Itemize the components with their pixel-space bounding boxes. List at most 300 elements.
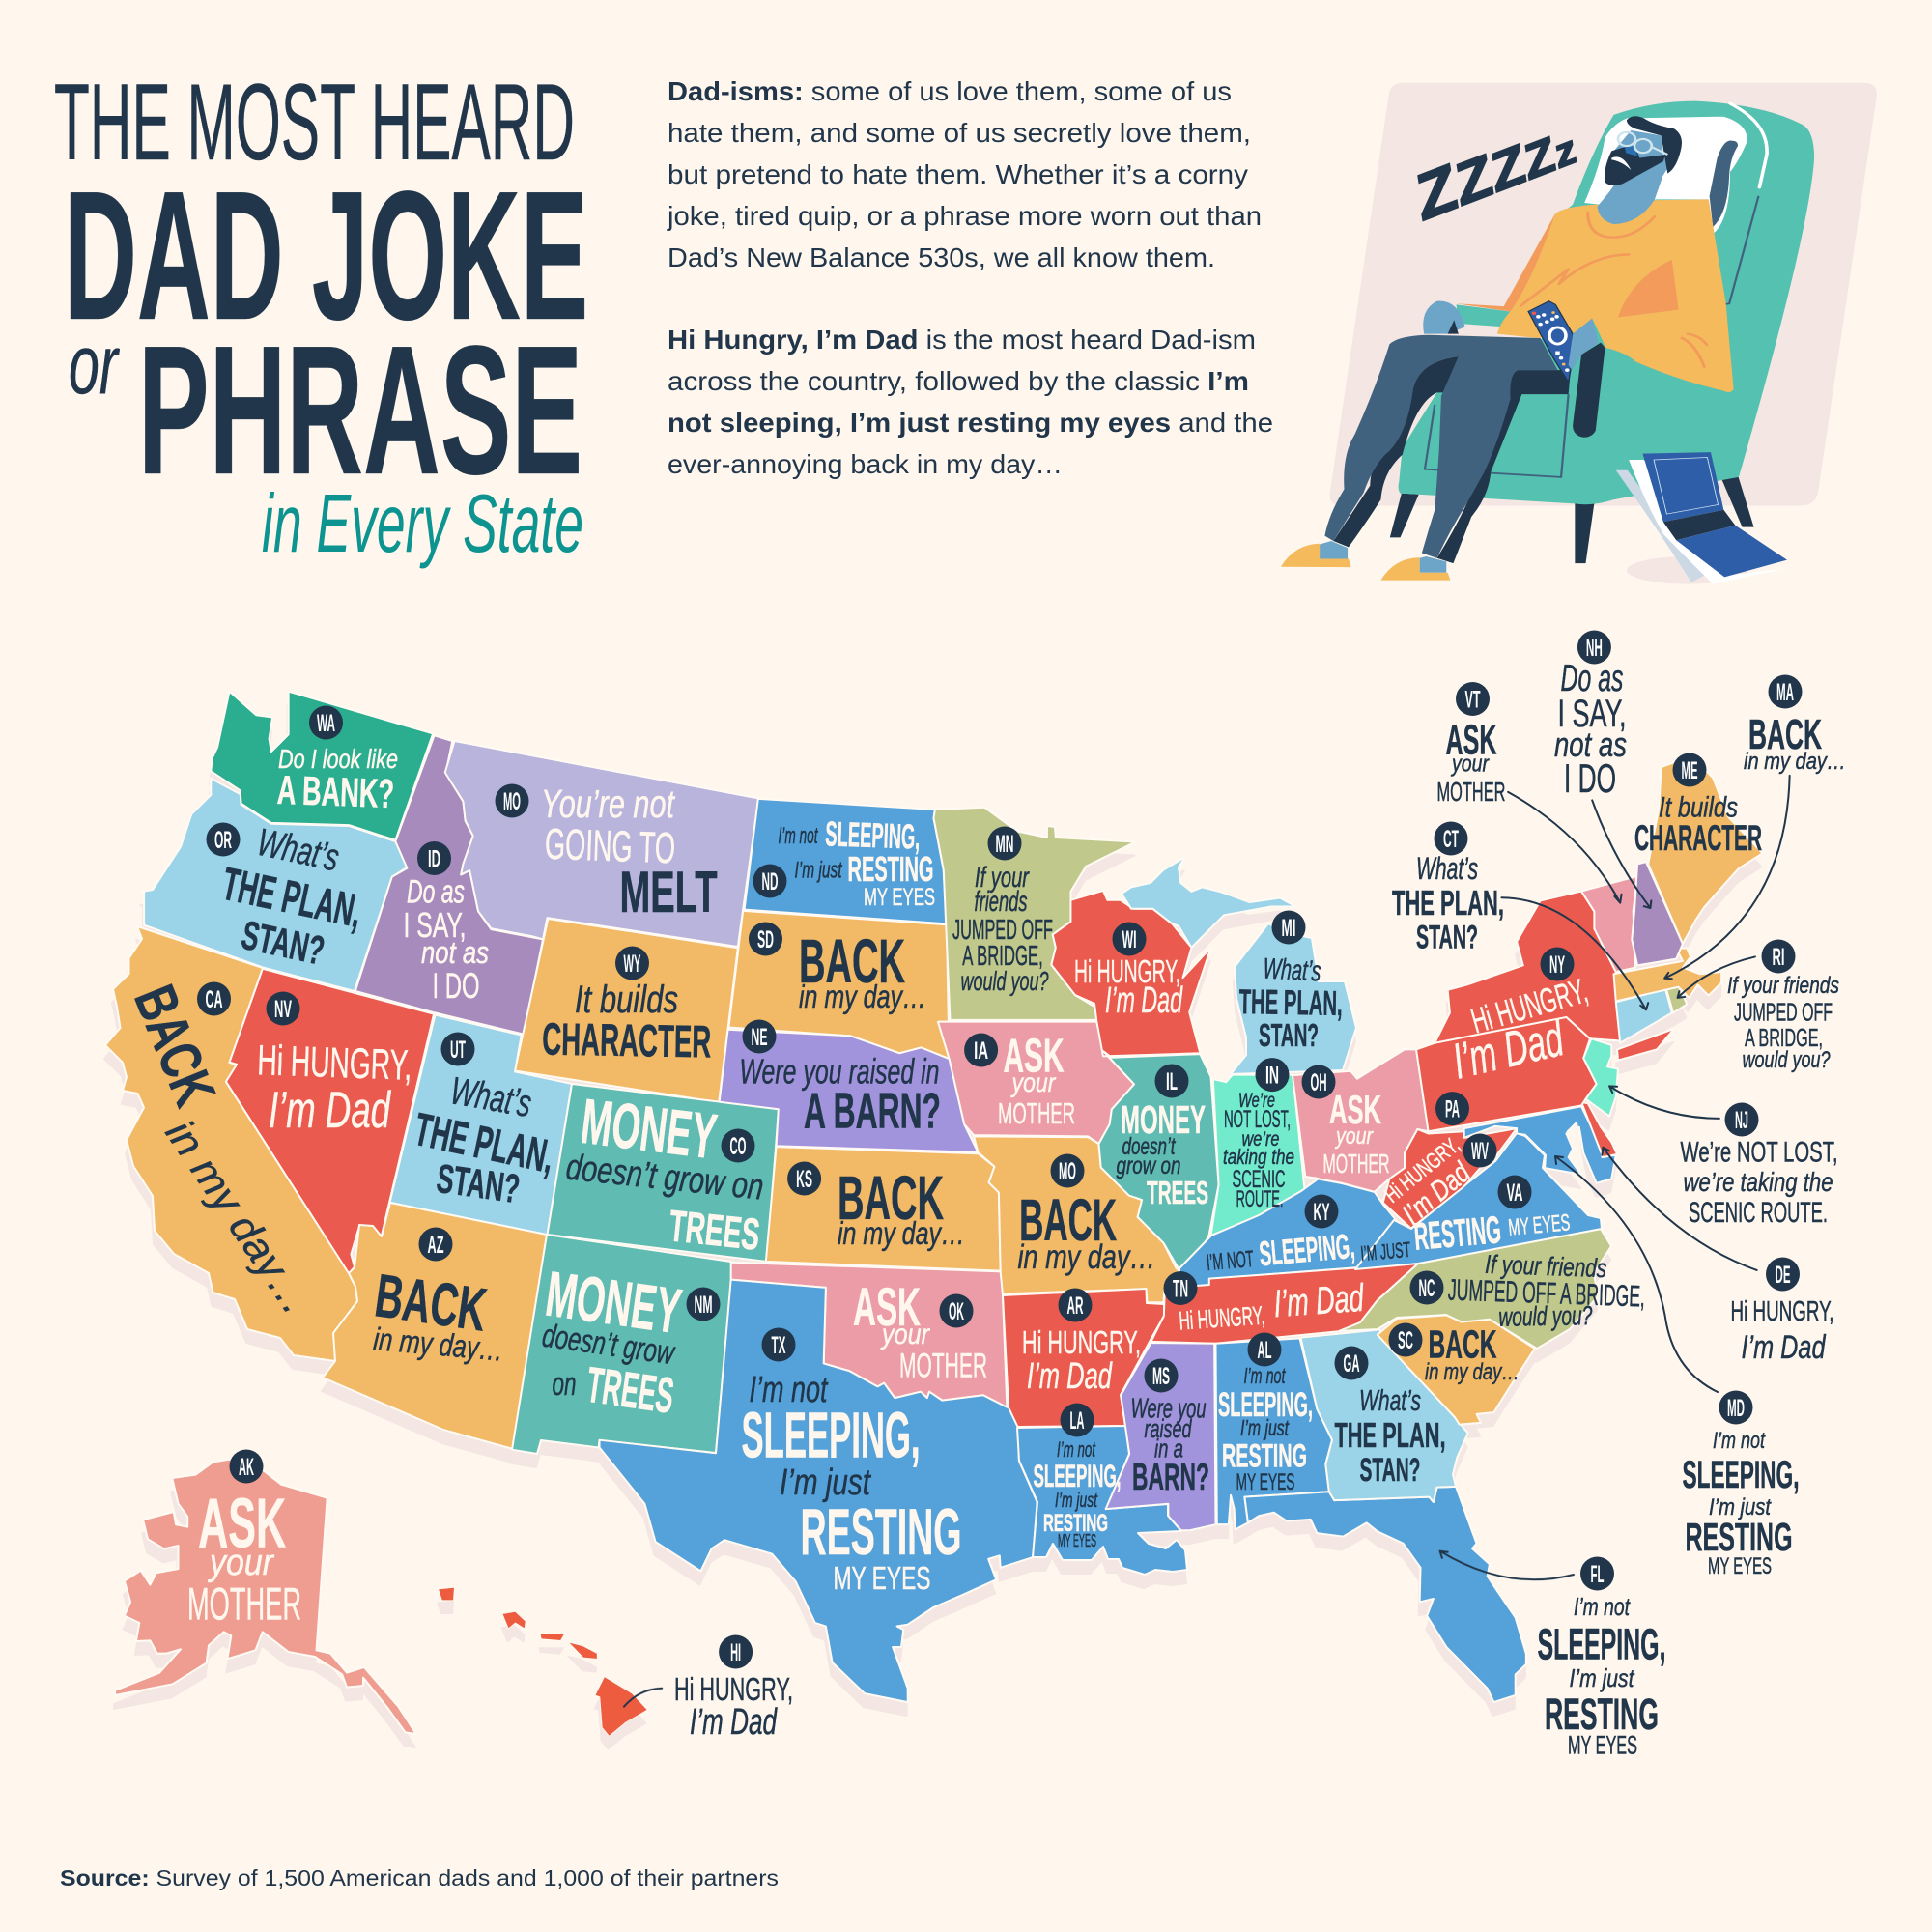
label: TX: TX xyxy=(771,1332,786,1359)
label: MI: THE PLAN, xyxy=(1238,981,1343,1023)
label: MD with arrow: I’m not xyxy=(1713,1428,1766,1454)
label: UT xyxy=(410,1032,558,1211)
label: AK: MOTHER xyxy=(187,1578,301,1630)
label: AR: I’m Dad xyxy=(1027,1356,1113,1397)
label: IL: grow on xyxy=(1117,1152,1180,1179)
label: MT (printed MO): MO xyxy=(503,788,521,815)
label: DE with arrow: DE xyxy=(1776,1262,1791,1289)
label: FL with arrow: I’m just xyxy=(1569,1663,1635,1692)
label: VA xyxy=(1359,1175,1571,1265)
label: ND: RESTING xyxy=(848,849,933,889)
label: MN xyxy=(952,827,1053,996)
label: CA: BACK xyxy=(122,977,228,1115)
label: KY: SLEEPING, xyxy=(1258,1226,1356,1273)
label: NY: NY xyxy=(1549,952,1565,979)
state: South Dakota xyxy=(728,911,950,1059)
state: Kansas xyxy=(766,1147,1001,1271)
label: VT with arrow: VT xyxy=(1464,686,1480,713)
state: North Carolina xyxy=(1339,1229,1611,1349)
label: WA xyxy=(276,705,398,816)
label: CT with arrow xyxy=(1392,821,1648,1009)
label: MI: STAN? xyxy=(1259,1017,1319,1053)
label: OH: MOTHER xyxy=(1323,1149,1389,1179)
label: IL xyxy=(1117,1065,1208,1210)
label: CA xyxy=(122,977,320,1322)
state: Kentucky xyxy=(1179,1177,1406,1291)
label: ID xyxy=(404,841,489,1006)
state: Washington xyxy=(211,692,433,840)
label: MD with arrow: I’m just xyxy=(1709,1494,1772,1520)
label: IN: SCENIC xyxy=(1233,1166,1285,1193)
label: AZ xyxy=(371,1227,505,1368)
label: MS: in a xyxy=(1154,1434,1183,1463)
label: NH with arrow: Do as xyxy=(1561,658,1623,699)
label: SC xyxy=(1389,1322,1520,1385)
label: CT with arrow: CT xyxy=(1443,826,1459,853)
label: NM: TREES xyxy=(583,1357,677,1425)
label: CO: CO xyxy=(730,1133,746,1160)
illustration: dad asleep in armchair xyxy=(1281,83,1877,584)
label: CA: CA xyxy=(205,986,222,1013)
title: or xyxy=(69,319,120,412)
label: VT with arrow xyxy=(1437,682,1622,903)
label: ND: MY EYES xyxy=(864,884,935,911)
label: CO: doesn’t grow on xyxy=(564,1147,765,1208)
label: ND: I’m not xyxy=(779,823,818,849)
label: MN: friends xyxy=(974,886,1028,918)
label: FL with arrow: I’m not xyxy=(1574,1592,1631,1621)
label: MD with arrow: MY EYES xyxy=(1708,1553,1772,1579)
label: NM xyxy=(540,1258,721,1425)
intro text block: hate them, and some of us secretly love them, xyxy=(668,118,1251,148)
state: California xyxy=(105,926,357,1361)
label: SD: SD xyxy=(757,926,774,953)
label: SC: SC xyxy=(1398,1327,1413,1354)
state: Virginia xyxy=(1355,1133,1602,1269)
state: Missouri xyxy=(974,1136,1179,1302)
state: Tennessee xyxy=(1151,1264,1418,1344)
label: OR xyxy=(207,821,366,974)
label: MO: MO xyxy=(1059,1158,1076,1185)
source note: Source: Survey of 1,500 American dads and 1,000 of their partners xyxy=(60,1865,779,1890)
label: OH: ASK xyxy=(1329,1087,1381,1132)
map of state shapes xyxy=(105,692,1763,1736)
label: IN: We’re xyxy=(1238,1090,1275,1112)
state: Ohio xyxy=(1293,1049,1429,1192)
label: GA: STAN? xyxy=(1360,1452,1420,1489)
intro text block: not sleeping, I’m just resting my eyes and the xyxy=(668,408,1273,438)
label: SD: BACK xyxy=(799,926,905,996)
label: AL: AL xyxy=(1258,1337,1271,1364)
label: MT (printed MO): You’re not xyxy=(541,781,675,826)
label: OK: MOTHER xyxy=(899,1348,987,1385)
label: GA: GA xyxy=(1343,1350,1360,1378)
label: AR: AR xyxy=(1066,1293,1084,1320)
label: NE xyxy=(740,1020,941,1140)
label: PA: PA xyxy=(1445,1096,1460,1123)
label: FL with arrow xyxy=(1440,1551,1665,1760)
label: ID: not as xyxy=(421,935,489,970)
label: UT: THE PLAN, xyxy=(410,1104,558,1183)
label: CO xyxy=(564,1085,765,1260)
state: Arkansas xyxy=(1003,1289,1164,1427)
state: Illinois xyxy=(1098,1051,1219,1268)
label: DE with arrow: I’m Dad xyxy=(1741,1329,1826,1366)
label: OH: OH xyxy=(1310,1069,1327,1096)
label: OH: your xyxy=(1334,1123,1374,1150)
label: IN: ROUTE. xyxy=(1236,1186,1283,1212)
label: UT: UT xyxy=(450,1037,466,1064)
label: MN: JUMPED OFF xyxy=(952,915,1053,946)
state: Alabama xyxy=(1215,1338,1332,1530)
label: SD xyxy=(749,922,926,1014)
label: TX: RESTING xyxy=(800,1495,962,1569)
state: Texas xyxy=(600,1280,1037,1702)
label: PA: I’m Dad xyxy=(1448,1010,1570,1091)
state: Iowa xyxy=(938,1022,1134,1144)
state: New Jersey xyxy=(1583,1038,1618,1117)
label: OH xyxy=(1302,1065,1389,1179)
intro text block: joke, tired quip, or a phrase more worn out than xyxy=(667,201,1262,231)
state: Indiana xyxy=(1211,1075,1304,1236)
label: IN: IN xyxy=(1265,1063,1279,1090)
label: MS: Were you xyxy=(1130,1393,1206,1424)
label: NC: would you? xyxy=(1498,1300,1593,1332)
label: MD with arrow: RESTING xyxy=(1685,1515,1793,1559)
label: MO: in my day… xyxy=(1018,1238,1155,1276)
label: KS: in my day… xyxy=(838,1215,965,1251)
intro text block: but pretend to hate them. Whether it’s a corny xyxy=(668,159,1248,189)
state: Oregon xyxy=(141,779,407,991)
title: in Every State xyxy=(262,478,583,570)
label: TX: I’m not xyxy=(750,1370,829,1410)
label: LA: LA xyxy=(1070,1407,1084,1435)
label: ID: ID xyxy=(428,846,440,873)
state: Connecticut xyxy=(1616,989,1672,1043)
label: OR: THE PLAN, xyxy=(217,859,366,938)
label: OR: What’s xyxy=(254,821,343,880)
label: NM: on xyxy=(553,1366,576,1403)
label: NY: Hi HUNGRY, xyxy=(1466,970,1592,1040)
label: WY xyxy=(542,947,712,1067)
state: Mississippi xyxy=(1106,1343,1215,1530)
state: South Carolina xyxy=(1378,1315,1535,1425)
label: FL with arrow: RESTING xyxy=(1545,1690,1659,1739)
label: AK: ASK xyxy=(198,1486,286,1563)
label: NY xyxy=(1466,947,1592,1040)
label: MN: If your xyxy=(975,862,1030,894)
label: MT (printed MO): MELT xyxy=(620,860,717,924)
label: TX: SLEEPING, xyxy=(742,1399,920,1472)
label: WA: Do I look like xyxy=(278,744,398,774)
label: MI xyxy=(1238,910,1343,1053)
label: VT with arrow: MOTHER xyxy=(1437,777,1505,807)
label: IL: doesn’t xyxy=(1122,1133,1176,1160)
label: LA: MY EYES xyxy=(1058,1531,1096,1550)
label: NM: MONEY xyxy=(542,1258,686,1347)
label: OK: your xyxy=(880,1319,930,1350)
label: NV: NV xyxy=(274,996,292,1023)
label: FL with arrow: FL xyxy=(1590,1561,1604,1588)
state: Utah xyxy=(390,1015,572,1235)
label: VA: I’M JUST xyxy=(1359,1237,1411,1265)
state: Delaware xyxy=(1581,1102,1617,1157)
label: KS xyxy=(787,1161,965,1251)
intro text block: ever-annoying back in my day… xyxy=(668,449,1063,479)
state: Wyoming xyxy=(515,919,738,1102)
label: DE with arrow: Hi HUNGRY, xyxy=(1731,1296,1833,1327)
label: IA: IA xyxy=(974,1037,988,1065)
label: VA: VA xyxy=(1507,1179,1522,1207)
label: AL: I’m not xyxy=(1244,1363,1286,1388)
label: LA: SLEEPING, xyxy=(1034,1459,1121,1493)
label: OK: ASK xyxy=(853,1276,921,1337)
label: CT with arrow: STAN? xyxy=(1416,920,1478,956)
label: GA xyxy=(1335,1347,1445,1489)
label: WV: I’m Dad xyxy=(1397,1156,1477,1231)
label: SC: in my day… xyxy=(1425,1359,1520,1385)
label: AL: SLEEPING, xyxy=(1218,1386,1313,1424)
label: NH with arrow: not as xyxy=(1554,724,1627,764)
title xyxy=(54,62,588,570)
state: Nebraska xyxy=(720,1030,978,1152)
label: KS: BACK xyxy=(838,1163,944,1233)
label: MS: MS xyxy=(1152,1363,1170,1390)
label: DE with arrow xyxy=(1602,1148,1833,1366)
label: MA with arrow: in my day… xyxy=(1744,749,1846,775)
label: OK xyxy=(853,1276,987,1385)
label: IA: MOTHER xyxy=(998,1096,1075,1130)
label: WA: WA xyxy=(317,710,335,737)
label: IN xyxy=(1223,1058,1294,1212)
label: NV: Hi HUNGRY, xyxy=(257,1037,412,1090)
intro text block xyxy=(667,76,1273,479)
label: AK: AK xyxy=(239,1454,254,1481)
label: NV xyxy=(257,991,412,1139)
label: ME: CHARACTER xyxy=(1634,818,1762,858)
state: Vermont xyxy=(1581,876,1637,972)
label: NE: Were you raised in xyxy=(740,1051,939,1092)
label: NM: NM xyxy=(694,1292,713,1319)
label: MO: BACK xyxy=(1019,1187,1117,1253)
state: New Hampshire xyxy=(1632,862,1683,965)
label: LA xyxy=(1034,1403,1121,1550)
state: Colorado xyxy=(547,1084,779,1262)
state: Maryland xyxy=(1464,1106,1616,1183)
label: NH with arrow: NH xyxy=(1586,635,1603,662)
label: UT: STAN? xyxy=(434,1155,523,1211)
label: CT with arrow: What’s xyxy=(1416,851,1478,886)
label: AZ: AZ xyxy=(427,1232,444,1259)
label: IA: your xyxy=(1010,1067,1057,1097)
label: NE: A BARN? xyxy=(804,1084,941,1140)
label: HI with connector xyxy=(624,1634,793,1743)
label: AR: Hi HUNGRY, xyxy=(1022,1324,1141,1360)
state: Florida xyxy=(1244,1487,1526,1702)
label: MS: raised xyxy=(1144,1414,1192,1443)
state: Alaska xyxy=(115,1460,416,1734)
label: MN: A BRIDGE, xyxy=(962,941,1043,972)
intro text block: Hi Hungry, I’m Dad is the most heard Dad-ism xyxy=(668,325,1256,355)
label: SC: BACK xyxy=(1428,1322,1497,1367)
state: Hawaii islands xyxy=(439,1587,647,1736)
state: Montana xyxy=(445,741,758,947)
label: FL with arrow: SLEEPING, xyxy=(1538,1619,1665,1669)
state: Idaho xyxy=(355,735,543,1035)
label: NJ with arrow: we’re taking the xyxy=(1683,1167,1833,1197)
label: AL: MY EYES xyxy=(1236,1469,1294,1495)
label: MI: What’s xyxy=(1263,952,1321,988)
label: NJ with arrow xyxy=(1609,1086,1837,1229)
label: RI with arrow: If your friends xyxy=(1727,973,1839,999)
label: KY xyxy=(1206,1194,1356,1276)
label: MT (printed MO) xyxy=(495,781,717,924)
label: NH with arrow xyxy=(1554,630,1651,908)
label: WA: A BANK? xyxy=(276,767,395,816)
label: OR: OR xyxy=(214,827,232,854)
label: AK xyxy=(187,1449,301,1630)
label: TN xyxy=(1163,1271,1366,1336)
label: NC: JUMPED OFF A BRIDGE, xyxy=(1447,1272,1646,1314)
label: HI with connector: HI xyxy=(730,1639,741,1666)
label: NC xyxy=(1410,1250,1646,1332)
label: WI xyxy=(1074,922,1183,1021)
label: NJ with arrow: SCENIC ROUTE. xyxy=(1689,1197,1828,1229)
label: ND: ND xyxy=(761,868,779,895)
label: NJ with arrow: We’re NOT LOST, xyxy=(1681,1136,1837,1169)
label: ID: I DO xyxy=(433,966,479,1006)
intro text block: Dad-isms: some of us love them, some of us xyxy=(668,76,1232,106)
intro text block: Dad’s New Balance 530s, we all know them. xyxy=(668,242,1215,272)
label: AZ: BACK xyxy=(371,1262,491,1345)
label: VT with arrow: ASK xyxy=(1445,717,1497,764)
state: West Virginia xyxy=(1383,1128,1517,1229)
label: IN: NOT LOST, xyxy=(1224,1106,1291,1133)
state: Pennsylvania xyxy=(1416,1017,1597,1131)
label: NH with arrow: I DO xyxy=(1564,755,1616,801)
label: MS: BARN? xyxy=(1132,1457,1209,1498)
label: WV: WV xyxy=(1471,1138,1489,1165)
label: HI with connector: Hi HUNGRY, xyxy=(674,1671,793,1707)
label: RI with arrow: RI xyxy=(1772,944,1785,971)
label: IL: IL xyxy=(1166,1068,1178,1095)
label: MD with arrow xyxy=(1555,1156,1799,1579)
state: Maine xyxy=(1648,756,1763,944)
label: NC: If your friends xyxy=(1485,1250,1607,1283)
label: TN: Hi HUNGRY, xyxy=(1178,1301,1265,1336)
label: AR xyxy=(1022,1289,1141,1397)
label: TN: TN xyxy=(1173,1275,1188,1302)
label: AL xyxy=(1218,1333,1313,1495)
label: ND xyxy=(753,813,935,911)
label: NJ with arrow: NJ xyxy=(1735,1107,1748,1134)
label: AZ: in my day… xyxy=(372,1321,505,1368)
state: Rhode Island xyxy=(1666,985,1687,1012)
label: GA: THE PLAN, xyxy=(1335,1415,1445,1455)
label: NM: doesn’t grow xyxy=(540,1317,678,1372)
label: TX xyxy=(742,1327,962,1596)
title: THE MOST HEARD xyxy=(54,62,575,183)
label: IL: TREES xyxy=(1147,1175,1208,1210)
label: ID: Do as xyxy=(407,873,465,910)
label: TN: I’m Dad xyxy=(1272,1277,1366,1325)
label: RI with arrow: A BRIDGE, xyxy=(1745,1023,1823,1052)
label: IN: we’re xyxy=(1242,1128,1279,1151)
label: MO xyxy=(1018,1153,1155,1276)
label: RI with arrow xyxy=(1678,939,1839,1073)
label: FL with arrow: MY EYES xyxy=(1568,1731,1637,1760)
label: PA xyxy=(1435,1010,1570,1125)
label: MA with arrow: BACK xyxy=(1748,711,1822,758)
label: CT with arrow: THE PLAN, xyxy=(1392,883,1504,923)
label: VT with arrow: your xyxy=(1450,752,1490,777)
label: OR: STAN? xyxy=(238,912,328,974)
label: RI with arrow: JUMPED OFF xyxy=(1734,997,1833,1026)
label: VA: MY EYES xyxy=(1507,1209,1571,1241)
label: MT (printed MO): GOING TO xyxy=(544,819,676,872)
label: IN: taking the xyxy=(1223,1145,1294,1169)
label: UT: What’s xyxy=(447,1069,534,1125)
label: ME: ME xyxy=(1681,757,1698,784)
label: LA: I’m not xyxy=(1057,1437,1096,1462)
state: Massachusetts xyxy=(1614,948,1721,1001)
label: MD with arrow: SLEEPING, xyxy=(1683,1454,1799,1496)
state: Long Island xyxy=(1617,1029,1674,1061)
title: PHRASE xyxy=(138,308,582,513)
label: TX: MY EYES xyxy=(833,1560,931,1596)
state: Wisconsin xyxy=(1051,891,1211,1056)
label: WI: WI xyxy=(1122,926,1136,953)
label: LA: RESTING xyxy=(1043,1510,1108,1537)
label: ME: It builds xyxy=(1659,792,1738,823)
state: Louisiana xyxy=(1017,1426,1187,1575)
label: NH with arrow: I SAY, xyxy=(1557,693,1627,735)
label: TX: I’m just xyxy=(780,1463,871,1503)
label: IA xyxy=(964,1030,1075,1130)
label: NC: NC xyxy=(1418,1275,1435,1302)
label: ND: SLEEPING, xyxy=(825,813,921,857)
label: MI: MI xyxy=(1281,915,1296,942)
label: GA: What’s xyxy=(1359,1383,1421,1417)
label: IA: ASK xyxy=(1003,1030,1065,1082)
label: ND: I’m just xyxy=(794,858,842,884)
snore text: ZZZZz xyxy=(1402,106,1584,234)
label: MS xyxy=(1130,1358,1209,1498)
label: MA with arrow xyxy=(1664,674,1846,979)
label: NV: I’m Dad xyxy=(269,1082,391,1139)
state: Arizona xyxy=(323,1203,547,1449)
Chesapeake Bay cut xyxy=(1566,1121,1587,1181)
label: VA: RESTING xyxy=(1412,1208,1503,1259)
label: OK: OK xyxy=(949,1298,964,1325)
label: KS: KS xyxy=(796,1166,812,1193)
label: WV: Hi HUNGRY, xyxy=(1379,1132,1464,1208)
label: MN: MN xyxy=(995,831,1014,858)
label: IL: MONEY xyxy=(1121,1097,1206,1142)
state: Minnesota xyxy=(934,808,1135,1020)
state: New Mexico xyxy=(512,1235,731,1454)
intro text block: across the country, followed by the classic I’m xyxy=(668,366,1249,396)
label: WY: It builds xyxy=(575,979,678,1021)
state: North Dakota xyxy=(745,799,947,923)
label: WY: WY xyxy=(624,951,641,978)
label: ME xyxy=(1634,753,1762,858)
label: CA: in my day… xyxy=(157,1112,320,1322)
label: CO: MONEY xyxy=(578,1085,721,1172)
label: WY: CHARACTER xyxy=(542,1012,712,1067)
label: KY: I’M NOT xyxy=(1206,1246,1255,1276)
label: AL: I’m just xyxy=(1240,1415,1290,1440)
